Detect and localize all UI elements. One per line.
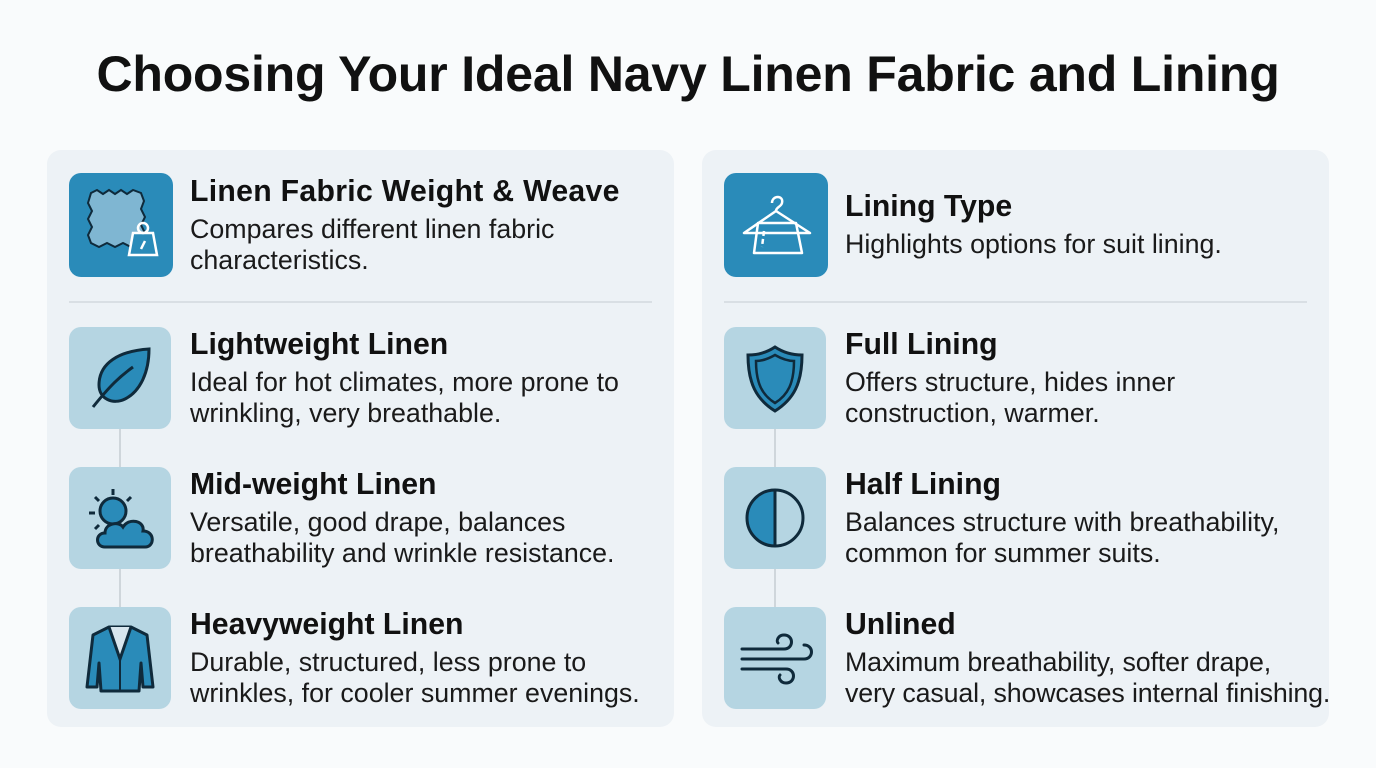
text: midweight: Versatile, good drape, balances bbox=[190, 507, 565, 537]
text: heavyweight bbox=[190, 608, 640, 708]
text: half lining: Half Lining bbox=[845, 468, 1001, 501]
text: half lining: Balances structure with breathability, bbox=[845, 507, 1279, 537]
text: lightweight: Lightweight Linen bbox=[190, 328, 448, 361]
icon: hanger bbox=[724, 173, 828, 277]
panel: fabric weight bbox=[47, 150, 674, 727]
text: half lining: common for summer suits. bbox=[845, 538, 1161, 568]
text: midweight: Mid-weight Linen bbox=[190, 468, 436, 501]
text: unlined: Unlined bbox=[845, 608, 956, 641]
heading: lining: Lining Type bbox=[845, 190, 1012, 223]
heading: fabric: characteristics. bbox=[190, 245, 369, 275]
title: Choosing Your Ideal Navy Linen Fabric and Lining bbox=[96, 46, 1280, 102]
text: lightweight: Ideal for hot climates, more prone to bbox=[190, 367, 619, 397]
icon: wind bbox=[724, 607, 826, 709]
icon: half circle bbox=[724, 467, 826, 569]
text: heavyweight: Durable, structured, less prone to bbox=[190, 647, 586, 677]
text: full lining: construction, warmer. bbox=[845, 398, 1100, 428]
panel: lining bbox=[702, 150, 1329, 727]
icon: fabric swatch with weight bbox=[69, 173, 173, 277]
icon: sun cloud bbox=[69, 467, 171, 569]
text: full lining: Offers structure, hides inner bbox=[845, 367, 1175, 397]
text: lightweight: wrinkling, very breathable. bbox=[190, 398, 501, 428]
text: unlined bbox=[845, 608, 1330, 708]
heading: fabric bbox=[190, 175, 620, 275]
text: unlined: very casual, showcases internal finishing. bbox=[845, 678, 1330, 708]
heading: lining: Highlights options for suit lining. bbox=[845, 229, 1222, 259]
heading: fabric: Compares different linen fabric bbox=[190, 214, 554, 244]
icon: leaf bbox=[69, 327, 171, 429]
heading: lining bbox=[845, 190, 1222, 259]
text: full lining bbox=[845, 328, 1175, 428]
text: half lining bbox=[845, 468, 1279, 568]
text: full lining: Full Lining bbox=[845, 328, 998, 361]
icon: jacket bbox=[69, 607, 171, 709]
text: midweight bbox=[190, 468, 614, 568]
text: unlined: Maximum breathability, softer drape, bbox=[845, 647, 1271, 677]
text: lightweight bbox=[190, 328, 619, 428]
icon: shield bbox=[724, 327, 826, 429]
text: midweight: breathability and wrinkle resistance. bbox=[190, 538, 614, 568]
heading: fabric: Linen Fabric Weight & Weave bbox=[190, 175, 620, 208]
text: heavyweight: wrinkles, for cooler summer evenings. bbox=[190, 678, 640, 708]
text: heavyweight: Heavyweight Linen bbox=[190, 608, 463, 641]
